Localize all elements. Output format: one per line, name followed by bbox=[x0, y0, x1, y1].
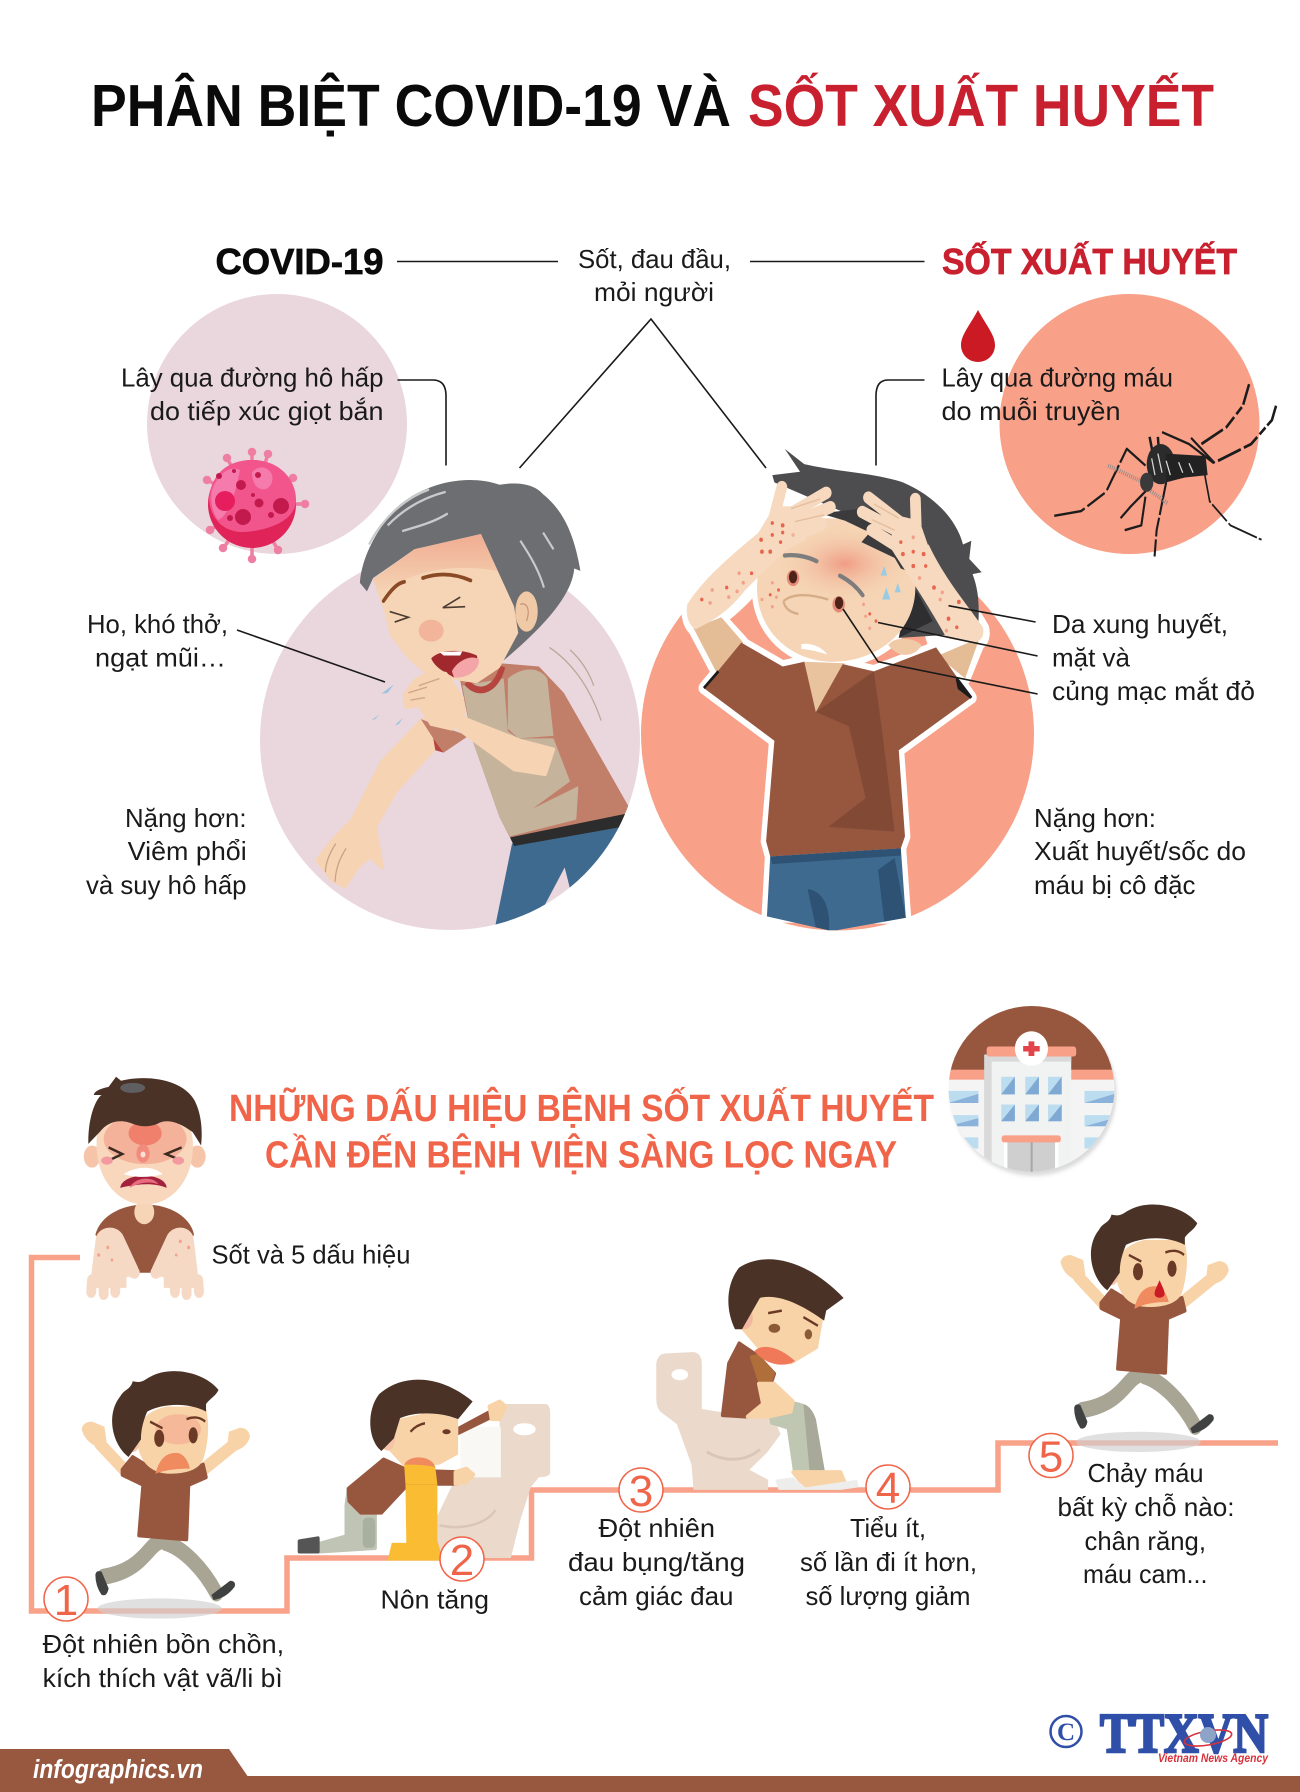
pants bbox=[495, 824, 626, 925]
illustration: dengue man bbox=[687, 449, 984, 930]
text: shared symptoms: Sốt, đau đầu, bbox=[578, 244, 731, 274]
illustration: coughing man bbox=[460, 663, 629, 925]
text: step 4 bbox=[800, 1513, 977, 1611]
text: step 4: số lần đi ít hơn, bbox=[800, 1547, 977, 1577]
title: SỐT XUẤT HUYẾT bbox=[748, 73, 1214, 139]
facial features bbox=[109, 1147, 182, 1161]
panel: dengue background circle top bbox=[1000, 294, 1260, 554]
left forearm bbox=[687, 533, 787, 629]
text: step 1 bbox=[43, 1629, 284, 1693]
text: step 5: máu cam... bbox=[1083, 1559, 1208, 1589]
ear bbox=[515, 591, 538, 632]
forearm bbox=[454, 714, 553, 774]
title: PHÂN BIỆT COVID-19 VÀ bbox=[91, 72, 731, 139]
heading: warning signs bbox=[229, 1085, 934, 1176]
icon: mosquito bbox=[1054, 384, 1276, 556]
hair fringe bbox=[820, 506, 924, 573]
text: dengue severe bbox=[1034, 803, 1246, 900]
face bbox=[373, 534, 518, 683]
illustration: vomiting boy step 2 bbox=[299, 1380, 550, 1561]
step marker 5: 5 bbox=[1039, 1432, 1063, 1482]
text: covid severe bbox=[86, 803, 247, 900]
text: covid transmission bbox=[121, 362, 384, 426]
upper arms bbox=[694, 617, 743, 676]
facial features bbox=[785, 555, 863, 595]
text: step 3: đau bụng/tăng bbox=[568, 1547, 745, 1577]
arm hanging bbox=[317, 719, 468, 887]
text: step 1: Đột nhiên bồn chồn, bbox=[43, 1629, 284, 1659]
step marker 5 bbox=[1029, 1432, 1073, 1482]
text: dengue transmission bbox=[942, 362, 1173, 426]
text: shared symptoms: mỏi người bbox=[594, 277, 714, 307]
shirt bbox=[460, 663, 629, 837]
face bbox=[97, 1114, 193, 1205]
illustration: running boy step 5 bbox=[1060, 1204, 1229, 1452]
left arm and hand bbox=[89, 1228, 138, 1294]
hair bbox=[772, 449, 982, 638]
text: shared symptoms bbox=[578, 244, 731, 307]
step marker 1: 1 bbox=[54, 1576, 78, 1625]
text: step 4: số lượng giảm bbox=[806, 1581, 970, 1611]
panel: dengue background circle large bbox=[641, 538, 1034, 930]
text: step 5: Chảy máu bbox=[1088, 1458, 1204, 1488]
shirt bbox=[704, 643, 971, 857]
text: dengue symptoms: Da xung huyết, bbox=[1052, 609, 1228, 639]
motion lines bbox=[549, 647, 601, 721]
white outline bbox=[687, 518, 984, 918]
text: fever signs: Sốt và 5 dấu hiệu bbox=[212, 1240, 410, 1270]
icon: copyright bbox=[1050, 1716, 1082, 1747]
text: step 2: Nôn tăng bbox=[380, 1584, 489, 1614]
step marker 4: 4 bbox=[876, 1464, 900, 1513]
text: covid symptoms: ngạt mũi… bbox=[95, 642, 226, 672]
text: step 5: bất kỳ chỗ nào: bbox=[1058, 1492, 1234, 1522]
icon: blood drop bbox=[961, 310, 995, 362]
text: dengue symptoms: mặt và bbox=[1052, 642, 1131, 672]
step marker 4 bbox=[866, 1464, 910, 1513]
collar bbox=[466, 667, 502, 690]
right forearm bbox=[895, 545, 983, 643]
step marker 1 bbox=[44, 1576, 88, 1625]
connector lines bbox=[237, 262, 1038, 694]
left hand bbox=[757, 487, 830, 556]
icon: hospital bbox=[948, 1006, 1118, 1178]
text: step 3: Đột nhiên bbox=[598, 1513, 715, 1543]
footer bar bbox=[0, 1749, 1300, 1792]
text: covid transmission: do tiếp xúc giọt bắn bbox=[150, 396, 384, 426]
text: step 4: Tiểu ít, bbox=[850, 1513, 926, 1543]
heading: warning signs: NHỮNG DẤU HIỆU BỆNH SỐT XUẤT HUYẾT bbox=[229, 1085, 934, 1130]
face bbox=[757, 518, 915, 662]
text: covid symptoms: Ho, khó thở, bbox=[87, 609, 228, 639]
illustration: fever boy bbox=[84, 1077, 206, 1294]
text: dengue severe: máu bị cô đặc bbox=[1034, 870, 1196, 900]
text: step 5 bbox=[1058, 1458, 1234, 1589]
panel: covid background circle large bbox=[260, 550, 640, 930]
logo: TTXVN: Vietnam News Agency bbox=[1158, 1753, 1269, 1765]
neck bbox=[803, 662, 845, 712]
hair bbox=[88, 1077, 202, 1145]
pants bbox=[767, 848, 906, 930]
title bbox=[91, 72, 1214, 139]
droplets bbox=[371, 684, 403, 725]
right arm and hand bbox=[152, 1228, 200, 1294]
icon: copyright: C bbox=[1057, 1719, 1075, 1746]
step marker 2: 2 bbox=[450, 1536, 474, 1585]
step marker 3 bbox=[619, 1467, 663, 1516]
sweat bbox=[881, 566, 901, 600]
text: dengue severe: Nặng hơn: bbox=[1034, 803, 1156, 833]
text: step 3: cảm giác đau bbox=[579, 1581, 734, 1611]
text: step 1: kích thích vật vã/li bì bbox=[43, 1663, 283, 1693]
belt bbox=[510, 814, 625, 846]
ears bbox=[84, 1145, 100, 1168]
hand at mouth bbox=[404, 671, 464, 729]
heading: warning signs: CẦN ĐẾN BỆNH VIỆN SÀNG LỌC NGAY bbox=[265, 1132, 897, 1176]
text: covid symptoms bbox=[87, 609, 228, 672]
text: covid severe: Viêm phổi bbox=[128, 836, 247, 866]
text: dengue transmission: Lây qua đường máu bbox=[942, 362, 1173, 392]
text: covid severe: Nặng hơn: bbox=[125, 803, 246, 833]
icon: virus bbox=[204, 450, 308, 562]
text: covid transmission: Lây qua đường hô hấp bbox=[121, 362, 384, 392]
illustration: running boy step 1 bbox=[82, 1371, 250, 1619]
right hand bbox=[862, 498, 932, 573]
text: step 3 bbox=[568, 1513, 745, 1611]
text: dengue symptoms bbox=[1052, 609, 1255, 706]
text: dengue transmission: do muỗi truyền bbox=[942, 396, 1120, 426]
text: dengue severe: Xuất huyết/sốc do bbox=[1034, 836, 1246, 866]
illustration: sitting boy steps 3 and 4 bbox=[656, 1259, 859, 1490]
ear bbox=[888, 639, 922, 655]
hair bbox=[360, 480, 580, 660]
text: covid severe: và suy hô hấp bbox=[86, 870, 246, 900]
step marker 3: 3 bbox=[629, 1467, 653, 1516]
shirt bbox=[95, 1205, 194, 1273]
spots bbox=[700, 521, 961, 633]
panel: covid background circle top bbox=[147, 294, 407, 554]
text: step 5: chân răng, bbox=[1084, 1526, 1206, 1556]
logo: TTXVN: TTXVN bbox=[1100, 1703, 1268, 1765]
heading: covid: COVID-19 bbox=[216, 241, 384, 282]
facial features bbox=[384, 582, 404, 601]
step marker 2 bbox=[440, 1536, 484, 1585]
stepped path bbox=[32, 1258, 1278, 1611]
footer text: infographics.vn bbox=[33, 1756, 203, 1784]
text: dengue symptoms: củng mạc mắt đỏ bbox=[1052, 676, 1255, 706]
heading: dengue: SỐT XUẤT HUYẾT bbox=[942, 240, 1237, 282]
